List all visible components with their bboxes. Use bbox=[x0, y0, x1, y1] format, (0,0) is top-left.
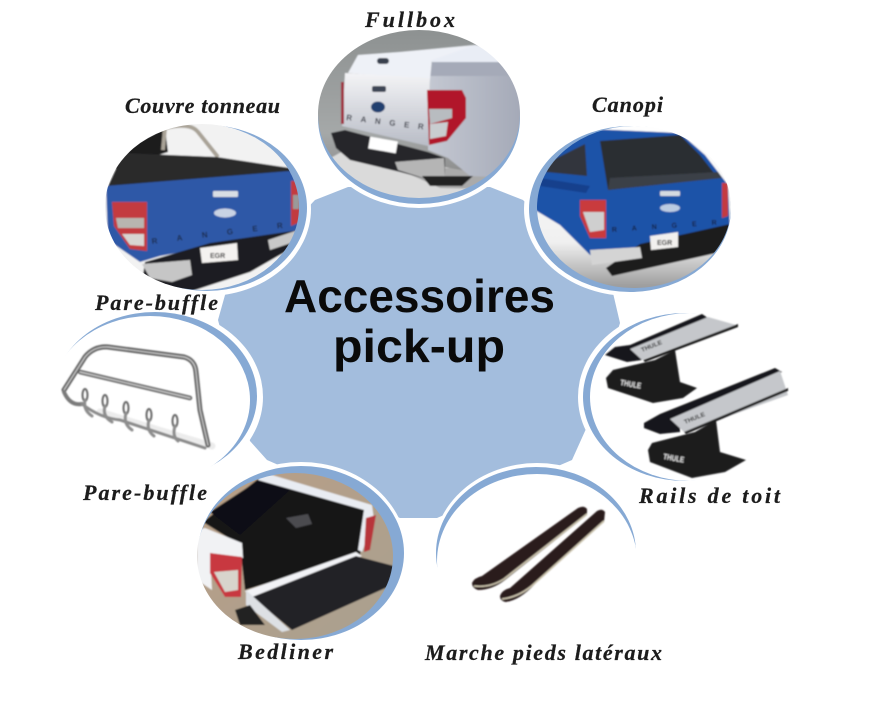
label: fullbox: Fullbox bbox=[364, 7, 455, 32]
plate text: EGR bbox=[210, 253, 225, 260]
white disc bbox=[50, 316, 250, 484]
crescent bbox=[529, 126, 731, 292]
label: canopi: Canopi bbox=[592, 92, 664, 117]
halo bbox=[313, 28, 525, 208]
photo: bedliner bbox=[197, 473, 393, 639]
label: pare-buffle bottom: Pare-buffle bbox=[82, 480, 207, 505]
halo bbox=[195, 462, 407, 644]
icon: roof rails: THULE bbox=[684, 412, 706, 426]
RANGER lettering: RANGER bbox=[151, 221, 283, 246]
white disc bbox=[590, 313, 790, 481]
halo bbox=[51, 308, 263, 486]
white disc bbox=[437, 474, 637, 648]
halo bbox=[578, 308, 790, 486]
title: Accessoires bbox=[284, 270, 555, 322]
halo bbox=[433, 463, 641, 643]
label: couvre tonneau: Couvre tonneau bbox=[125, 93, 280, 118]
panel: marche pieds bbox=[433, 463, 641, 648]
RANGER lettering: RANGER bbox=[346, 113, 424, 132]
crescent bbox=[53, 312, 257, 480]
RANGER lettering: RANGER bbox=[612, 220, 717, 234]
crescent bbox=[198, 466, 404, 640]
icon: roof rails: THULE bbox=[641, 340, 663, 354]
photo: tonneau bbox=[105, 124, 299, 290]
THULE mark: THULE bbox=[620, 378, 642, 391]
title: pick-up bbox=[333, 320, 505, 372]
icon: bull bar bbox=[64, 347, 212, 448]
icon: roof rails bbox=[605, 314, 788, 478]
panel: bedliner bbox=[190, 462, 407, 645]
photo: fullbox bbox=[318, 30, 520, 198]
title bbox=[284, 270, 555, 372]
label: marche pieds latéraux: Marche pieds latéraux bbox=[424, 640, 662, 665]
halo bbox=[524, 122, 736, 296]
THULE mark: THULE bbox=[663, 452, 685, 465]
panel: fullbox bbox=[318, 30, 520, 208]
label: bedliner: Bedliner bbox=[237, 639, 333, 664]
crescent bbox=[107, 125, 307, 291]
halo bbox=[103, 122, 311, 296]
label: rails de toit: Rails de toit bbox=[638, 483, 781, 508]
crescent bbox=[583, 313, 787, 481]
crescent bbox=[318, 32, 520, 204]
plate text: EGR bbox=[657, 240, 672, 247]
photo: canopi bbox=[537, 126, 731, 288]
label: pare-buffle top: Pare-buffle bbox=[94, 290, 218, 315]
panel: couvre tonneau bbox=[100, 120, 315, 296]
panel: pare-buffle bbox=[50, 308, 263, 486]
panel: rails de toit bbox=[578, 308, 790, 486]
crescent bbox=[436, 467, 636, 639]
panel: canopi bbox=[524, 120, 740, 296]
icon: side steps bbox=[472, 507, 605, 602]
central polygon bbox=[218, 187, 620, 518]
